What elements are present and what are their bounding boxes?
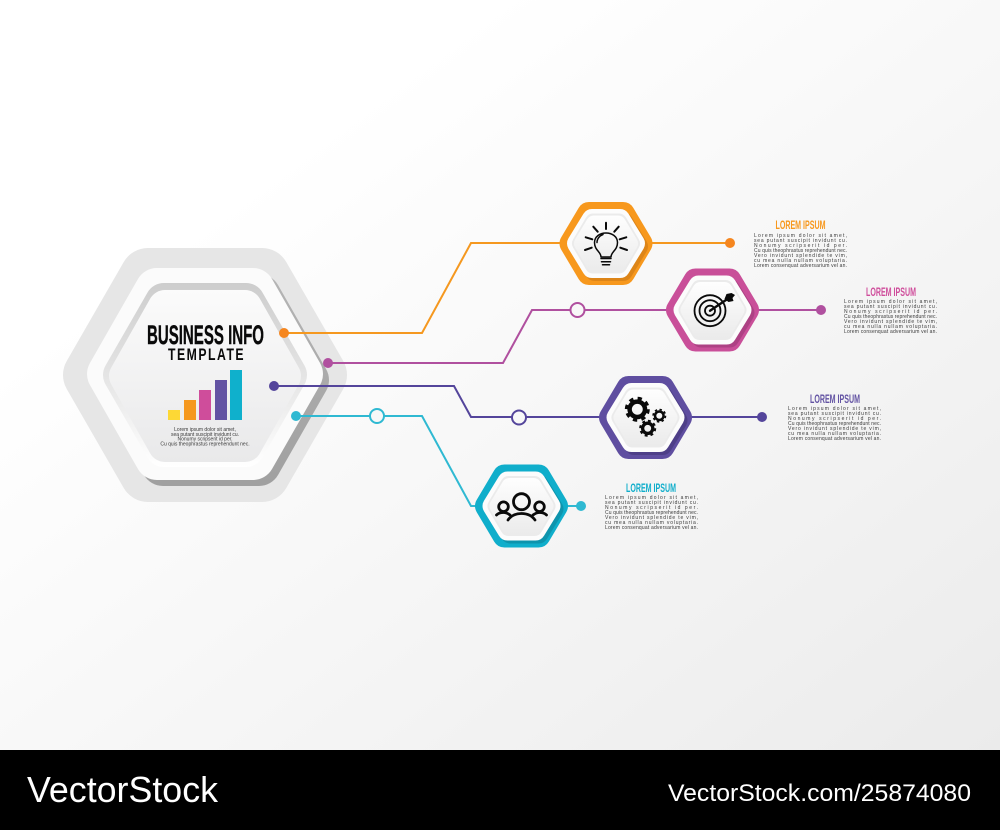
text block: pink: Nonumy scripserit id per. (844, 309, 937, 315)
text block: pink: Cu quis theophrastus reprehendunt nec. (844, 314, 937, 320)
text block: pink: cu mea nulla nullam voluptaria. (844, 324, 937, 330)
icon: target (694, 293, 735, 326)
text block: orange: Lorem consenquat adversarium vel an. (754, 263, 847, 269)
text block: teal: sea putant suscipit invidunt cu. (605, 500, 698, 506)
hexagon shadow (115, 296, 307, 464)
text block: purple: Lorem ipsum dolor sit amet, (788, 406, 881, 412)
main title: BUSINESS INFO (147, 320, 264, 350)
text block: orange: Vero invidunt splendide te vim, (754, 253, 847, 259)
footer url: VectorStock.com/25874080 (668, 780, 971, 807)
text block: purple: Cu quis theophrastus reprehendunt nec. (788, 421, 881, 427)
text block: teal: Lorem consenquat adversarium vel an. (605, 525, 698, 531)
connector: purple (269, 381, 767, 424)
text block: teal: Cu quis theophrastus reprehendunt nec. (605, 510, 698, 516)
icon: people (496, 494, 546, 520)
central body text: Nonumy scripserit id per. (177, 436, 233, 442)
text block: orange: sea putant suscipit invidunt cu. (754, 238, 847, 244)
text block: orange: Nonumy scripserit id per. (754, 243, 847, 249)
connector: teal (291, 409, 586, 511)
text block: orange: Lorem ipsum dolor sit amet, (754, 233, 847, 239)
outer grey hexagon (91, 276, 319, 474)
inner ring (122, 302, 288, 448)
text block: teal: cu mea nulla nullam voluptaria. (605, 520, 698, 526)
text block: purple: Vero invidunt splendide te vim, (788, 426, 881, 432)
node: purple gears (611, 388, 680, 447)
text block: purple: sea putant suscipit invidunt cu. (788, 411, 881, 417)
text block: teal: Vero invidunt splendide te vim, (605, 515, 698, 521)
text block: orange (754, 220, 847, 269)
central body text (160, 427, 250, 448)
subtitle: TEMPLATE (168, 346, 244, 365)
connector: orange (279, 238, 735, 338)
text block: purple: Lorem consenquat adversarium vel an. (788, 436, 881, 442)
text block: pink: Lorem ipsum dolor sit amet, (844, 299, 937, 305)
node: teal people (487, 476, 556, 536)
text block: pink: sea putant suscipit invidunt cu. (844, 304, 937, 310)
text block: purple: Nonumy scripserit id per. (788, 416, 881, 422)
node: pink target (678, 280, 747, 340)
central body text: Cu quis theophrastus reprehendunt nec. (160, 442, 250, 448)
node: orange lightbulb (572, 214, 640, 273)
text block: pink (844, 287, 937, 335)
bar chart (168, 370, 242, 420)
heading: orange: LOREM IPSUM (776, 220, 826, 232)
central hexagon (91, 276, 319, 474)
connector: pink (323, 303, 826, 368)
text block: orange: cu mea nulla nullam voluptaria. (754, 258, 847, 264)
text block: pink: Lorem consenquat adversarium vel an. (844, 329, 937, 335)
white middle hexagon (109, 290, 301, 458)
heading: pink: LOREM IPSUM (866, 287, 916, 299)
heading: purple: LOREM IPSUM (810, 394, 860, 406)
central body text: sea putant suscipit invidunt cu. (171, 432, 239, 438)
text block: purple: cu mea nulla nullam voluptaria. (788, 431, 881, 437)
heading: teal: LOREM IPSUM (626, 483, 676, 495)
footer logo: VectorStock (27, 769, 219, 810)
inner panel (126, 307, 284, 445)
text block: teal: Lorem ipsum dolor sit amet, (605, 495, 698, 501)
footer bar (0, 750, 1000, 830)
icon: lightbulb (585, 223, 627, 265)
central body text: Lorem ipsum dolor sit amet, (174, 427, 236, 433)
text block: teal (605, 483, 698, 531)
icon: gears (626, 398, 666, 436)
text block: purple (788, 394, 881, 442)
text block: pink: Vero invidunt splendide te vim, (844, 319, 937, 325)
text block: teal: Nonumy scripserit id per. (605, 505, 698, 511)
text block: orange: Cu quis theophrastus reprehendunt nec. (754, 248, 847, 254)
